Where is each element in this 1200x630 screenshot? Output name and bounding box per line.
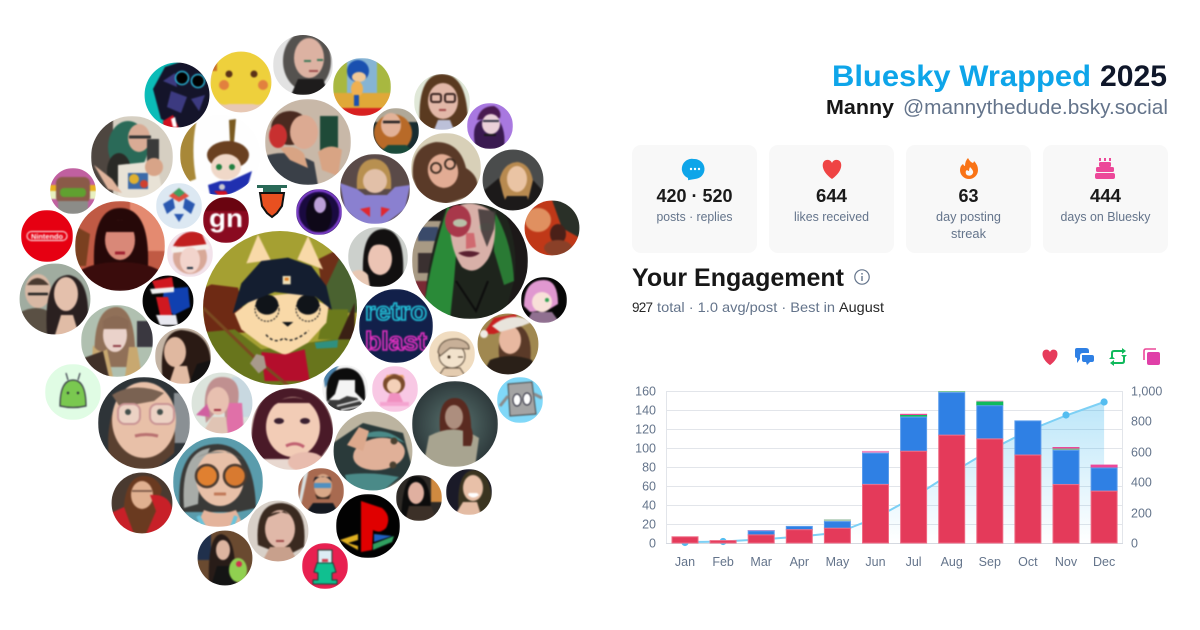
avatar: ombre blonde xyxy=(81,305,153,377)
right axis labels: 800 xyxy=(1131,414,1152,428)
legend: replies xyxy=(1075,348,1094,365)
avatar: Pikachu xyxy=(209,51,273,113)
left axis labels: 120 xyxy=(635,422,656,436)
left axis labels: 160 xyxy=(635,384,656,398)
left axis labels: 20 xyxy=(642,518,656,532)
stat label: day posting xyxy=(936,210,1001,224)
avatar: black lace top xyxy=(396,475,442,521)
avatar: orange close-up xyxy=(524,200,580,256)
panel: likes received xyxy=(769,145,894,253)
right axis labels: 400 xyxy=(1131,476,1152,490)
stat label: streak xyxy=(951,227,987,241)
month labels: Feb xyxy=(712,555,734,569)
month labels: May xyxy=(826,555,850,569)
avatar: holding green plush xyxy=(197,530,253,586)
cumulative points xyxy=(681,398,1108,546)
avatar bubble cluster xyxy=(19,31,580,589)
month labels: Mar xyxy=(750,555,772,569)
stat value: 644 xyxy=(816,186,847,206)
avatar: pink hair xyxy=(191,372,253,434)
month labels: Jun xyxy=(865,555,886,569)
user name and handle: Manny xyxy=(826,97,895,119)
left axis labels xyxy=(635,384,656,550)
stat label xyxy=(936,210,1001,241)
panel: days on Bluesky xyxy=(1043,145,1168,253)
month labels: Sep xyxy=(979,555,1001,569)
cumulative area xyxy=(685,402,1104,543)
avatar: hood and pink glasses xyxy=(98,377,190,469)
legend: quotes xyxy=(1144,349,1160,365)
avatar: Nintendo logo xyxy=(21,210,73,262)
avatar: anime boy xyxy=(180,118,253,195)
avatar: red-lit selfie xyxy=(75,201,165,291)
left axis labels: 80 xyxy=(642,460,656,474)
avatar: PlayStation logo xyxy=(336,494,400,558)
stat value: 444 xyxy=(1090,186,1121,206)
avatar: gn logo: gn xyxy=(209,203,243,233)
avatar: gn logo xyxy=(203,197,249,243)
title: Bluesky Wrapped xyxy=(832,60,1091,93)
icon: info xyxy=(855,270,869,284)
grid lines and axes xyxy=(666,391,1123,544)
avatar: pixel cat with beanie, the largest bubble xyxy=(203,231,357,385)
chart legend icons xyxy=(1043,348,1160,366)
left axis labels: 140 xyxy=(635,404,656,418)
legend: reposts xyxy=(1109,348,1127,366)
avatar: sketch boy with cap xyxy=(429,331,475,377)
engagement summary text xyxy=(632,299,884,315)
avatar: grey hair xyxy=(273,31,333,95)
avatar: orange sunglasses xyxy=(173,437,263,527)
avatar: Gengar plush xyxy=(340,154,410,224)
avatar: santa hat cosplay xyxy=(167,231,213,277)
avatar: pink hair anime xyxy=(521,277,567,323)
avatar: ghost diamond xyxy=(156,183,202,229)
avatar: green hair clown makeup, second largest bubble xyxy=(412,203,528,319)
avatar: cartoon grey box xyxy=(497,377,543,423)
month labels: Aug xyxy=(941,555,963,569)
left axis labels: 40 xyxy=(642,498,656,512)
avatar: red sweater xyxy=(111,472,173,534)
engagement summary text: total · 1.0 avg/post · Best in xyxy=(657,299,835,315)
avatar: santa hat brunette xyxy=(477,313,539,375)
avatar: brown hair glasses xyxy=(414,74,470,130)
month labels: Nov xyxy=(1055,555,1078,569)
avatar: big smile xyxy=(446,469,492,515)
stat label: days on Bluesky xyxy=(1060,210,1151,224)
avatar: pink doll xyxy=(372,366,418,412)
avatar: curly brown hair xyxy=(411,133,481,204)
heading: Your Engagement: Your Engagement xyxy=(632,264,845,292)
left axis labels: 60 xyxy=(642,480,656,494)
avatar: black and white drawing xyxy=(322,365,369,411)
icon: chat bubble xyxy=(682,159,705,180)
title: 2025 xyxy=(1100,60,1167,93)
avatar: dark bob hair xyxy=(247,500,309,562)
avatar: Nintendo logo: Nintendo xyxy=(31,232,63,241)
avatar: couple selfie xyxy=(19,263,91,335)
right axis labels: 1,000 xyxy=(1131,384,1162,398)
month labels: Jul xyxy=(906,555,922,569)
icon: flame xyxy=(960,158,978,179)
cumulative line xyxy=(685,402,1104,542)
icon: heart xyxy=(823,160,841,179)
stacked bars: replies xyxy=(748,393,1117,535)
right axis labels: 200 xyxy=(1131,506,1152,520)
avatar: Sonic game box xyxy=(333,58,391,116)
stat value: 420 · 520 xyxy=(656,186,732,206)
left axis labels: 0 xyxy=(649,536,656,550)
avatar: retro blast logo: retro xyxy=(365,296,427,326)
avatar: Sonic in santa suit xyxy=(142,275,194,327)
month labels: Oct xyxy=(1018,555,1038,569)
stat value: 63 xyxy=(958,186,978,206)
avatar: green hair mirror selfie xyxy=(91,116,173,198)
avatar: purple ring portrait xyxy=(296,189,342,235)
avatar: pixel carrot xyxy=(257,185,287,217)
avatar: purple hat xyxy=(467,103,513,149)
stacked bars: likes xyxy=(672,435,1117,543)
right axis labels: 0 xyxy=(1131,536,1138,550)
avatar: dim portrait in cardigan xyxy=(412,381,498,467)
avatar: red hair mirror selfie xyxy=(265,99,351,185)
avatar: black hair with bangs xyxy=(348,227,408,287)
stat label: likes received xyxy=(794,210,869,224)
avatar: auburn hair close-up xyxy=(251,388,334,472)
left axis labels: 100 xyxy=(635,442,656,456)
engagement summary text: 927 xyxy=(632,300,653,315)
stacked bars: reposts and quotes xyxy=(824,391,1080,521)
right axis labels xyxy=(1131,384,1162,550)
panel: posts and replies xyxy=(632,145,757,253)
stat label: posts · replies xyxy=(656,210,732,224)
avatar: bear with green mask xyxy=(50,168,96,214)
avatar: pixel figure on red xyxy=(302,543,348,589)
icon: birthday cake xyxy=(1095,158,1115,179)
user name and handle: @mannythedude.bsky.social xyxy=(903,97,1168,119)
avatar: Vader with sunglasses xyxy=(144,62,210,128)
avatar: teal hair sideways xyxy=(333,411,413,491)
engagement summary text: August xyxy=(839,299,884,315)
avatar: blonde hands to hair xyxy=(482,149,544,211)
month labels: Jan xyxy=(675,555,695,569)
avatar: retro blast logo xyxy=(359,289,433,363)
avatar: dark hair hoop earring xyxy=(155,328,211,384)
legend: likes xyxy=(1043,350,1057,365)
chart: monthly engagement stacked bars and cumulative line xyxy=(635,384,1162,569)
avatar: orange curly hair xyxy=(373,108,419,154)
month labels: Dec xyxy=(1093,555,1115,569)
panel: day posting streak xyxy=(906,145,1031,253)
month labels xyxy=(675,555,1115,569)
avatar: man with sunglasses xyxy=(298,468,344,514)
avatar: retro blast logo: blast xyxy=(365,326,427,356)
right axis labels: 600 xyxy=(1131,446,1152,460)
avatar: green blob mascot xyxy=(45,364,101,420)
month labels: Apr xyxy=(790,555,809,569)
